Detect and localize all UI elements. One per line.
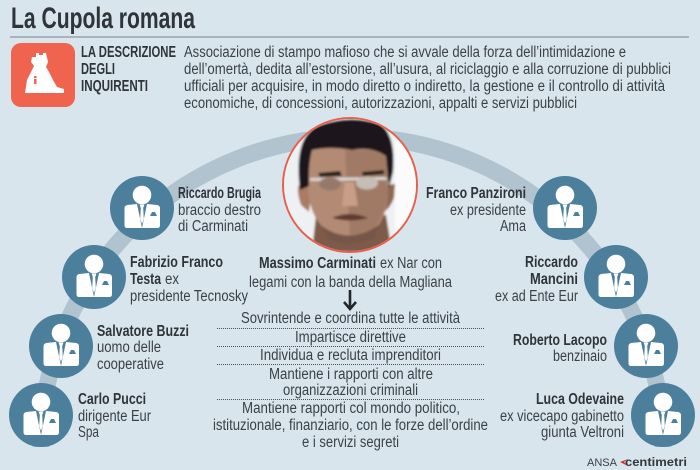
central caption: Massimo Carminati: legami con la banda della Magliana [249, 274, 452, 291]
title: La Cupola romana [11, 2, 195, 35]
central caption: Massimo Carminati [249, 255, 452, 291]
arrow pointing down [344, 290, 356, 309]
person: Franco Panzironi: Franco Panzironi [426, 185, 526, 202]
list of activities [213, 310, 488, 451]
person: Riccardo Brugia: di Carminati [178, 218, 248, 235]
person: Riccardo Brugia: Riccardo Brugia [178, 185, 261, 202]
person: Fabrizio Franco Testa: Fabrizio Franco [130, 254, 223, 271]
person: Riccardo Mancini: Mancini [530, 271, 578, 288]
person: Franco Panzironi: ex presidente [450, 202, 526, 219]
person: Luca Odevaine [500, 383, 695, 447]
central caption: Massimo Carminati: ex Nar con [380, 255, 442, 272]
person: Fabrizio Franco Testa [62, 245, 248, 309]
list of activities: Sovrintende e coordina tutte le attività [241, 310, 460, 327]
list of activities: organizzazioni criminali [283, 382, 418, 399]
person: Roberto Lacopo: benzinaio [553, 348, 607, 365]
person: Riccardo Brugia [110, 176, 261, 240]
person: Riccardo Mancini: ex ad Ente Eur [495, 288, 578, 305]
person: Salvatore Buzzi: Salvatore Buzzi [97, 323, 189, 340]
arc connecting the members [41, 137, 663, 447]
person: Luca Odevaine: ex vicecapo gabinetto [500, 408, 624, 425]
person: Salvatore Buzzi: uomo delle [97, 339, 161, 356]
list of activities: Mantiene i rapporti con altre [269, 366, 433, 383]
list of activities: Individua e recluta imprenditori [260, 347, 441, 364]
person: Fabrizio Franco Testa: Testa [130, 271, 161, 288]
person: Luca Odevaine: giunta Veltroni [541, 424, 624, 441]
description text block [184, 44, 671, 112]
heading: la descrizione degli inquirenti [81, 44, 176, 95]
heading: la descrizione degli inquirenti: INQUIRENTI [81, 78, 148, 95]
person: Roberto Lacopo [513, 314, 678, 378]
person: Riccardo Brugia: braccio destro [178, 202, 261, 219]
list of activities: istituzionale, finanziario, con le forze dell’ordine [213, 417, 488, 434]
description text block: Associazione di stampo mafioso che si avvale della forza dell’intimidazione e [184, 44, 626, 61]
description text block: economiche, di concessioni, autorizzazioni, appalti e servizi pubblici [184, 95, 577, 112]
credit: ANSA Centimetri [587, 455, 687, 469]
person: Carlo Pucci [9, 383, 151, 447]
person: Carlo Pucci: Spa [78, 424, 99, 441]
portrait photo: Massimo Carminati [283, 118, 417, 252]
person: Carlo Pucci: dirigente Eur [78, 408, 151, 425]
person: Roberto Lacopo: Roberto Lacopo [513, 332, 607, 349]
person: Salvatore Buzzi [29, 314, 189, 378]
person: Franco Panzironi [426, 176, 597, 240]
central caption: Massimo Carminati: Massimo Carminati [259, 255, 376, 272]
list of activities: Impartisce direttive [295, 329, 406, 346]
person: Carlo Pucci: Carlo Pucci [78, 391, 146, 408]
list of activities: e i servizi segreti [302, 434, 399, 451]
credit: ANSA Centimetri: ANSA [587, 457, 618, 469]
person: Fabrizio Franco Testa: ex [165, 271, 179, 288]
heading: la descrizione degli inquirenti: DEGLI [81, 61, 115, 78]
credit: ANSA Centimetri: centimetri [625, 455, 687, 469]
person: Riccardo Mancini [495, 245, 648, 309]
person: Franco Panzironi: Ama [500, 218, 526, 235]
icon: chess queen [11, 43, 75, 107]
person: Fabrizio Franco Testa: presidente Tecnosky [130, 288, 248, 305]
person: Luca Odevaine: Luca Odevaine [536, 391, 624, 408]
heading: la descrizione degli inquirenti: LA DESCRIZIONE [81, 44, 176, 61]
list of activities: Mantiene rapporti col mondo politico, [242, 400, 460, 417]
person: Salvatore Buzzi: cooperative [97, 356, 164, 373]
person: Riccardo Mancini: Riccardo [525, 254, 578, 271]
